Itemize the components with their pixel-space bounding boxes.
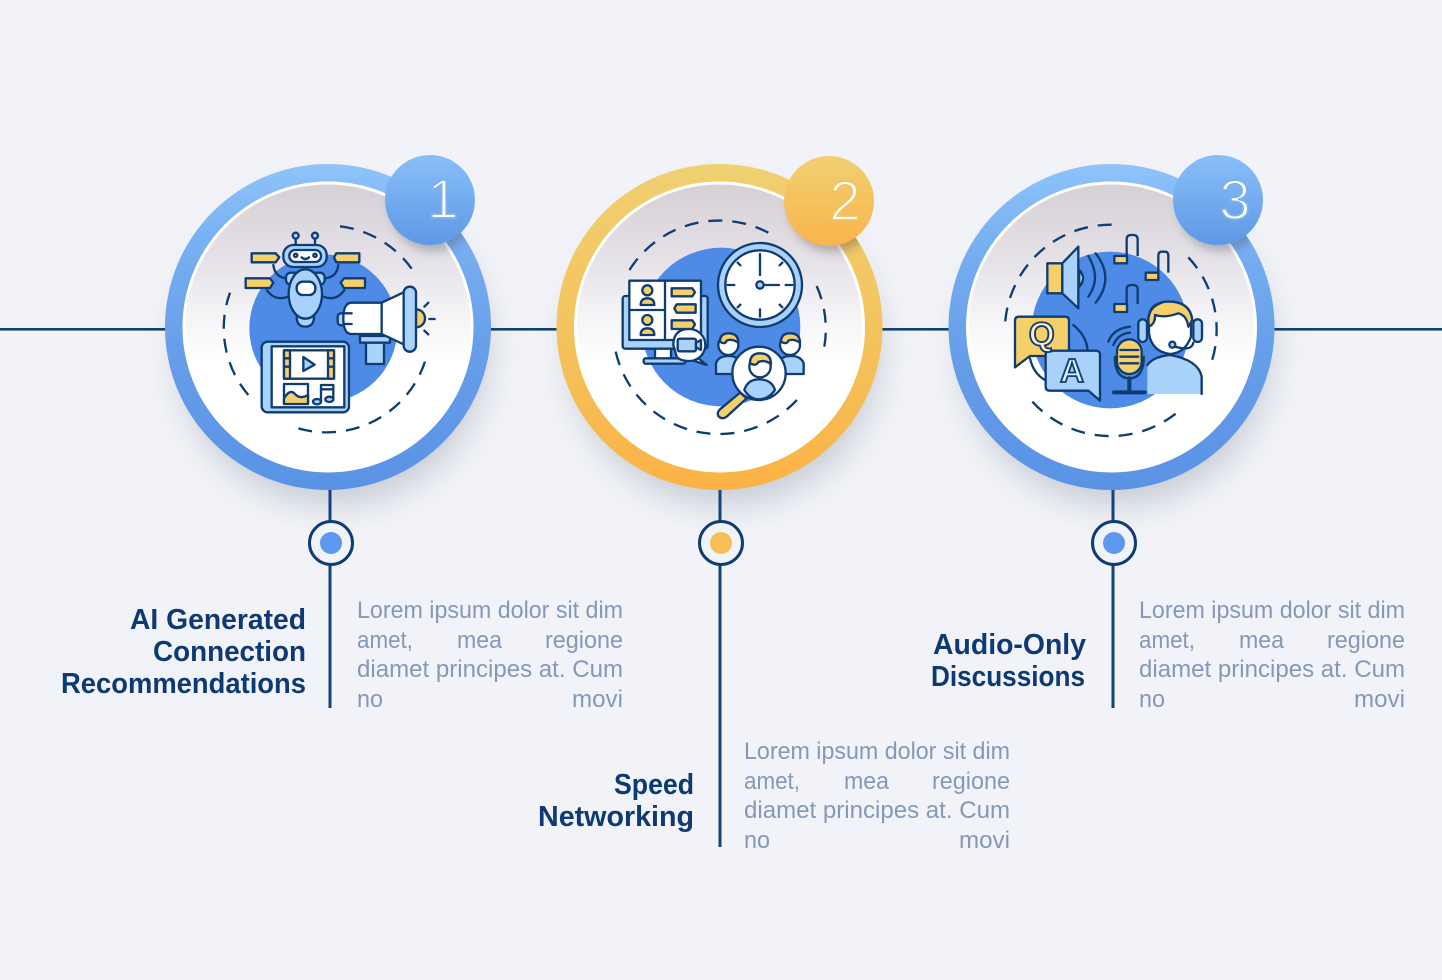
horizontal timeline <box>0 328 1442 331</box>
heading: step 3: Discussions <box>931 661 1085 693</box>
badge 1: 1 <box>427 167 459 230</box>
icon: robot, megaphone and media tablet <box>224 226 435 432</box>
panel: circle 3 <box>948 155 1274 490</box>
text block: step 2: mea <box>844 768 890 795</box>
heading: step 1: Recommendations <box>61 668 306 700</box>
text block: step 2: movi <box>959 827 1010 854</box>
badge 2: 2 <box>829 169 861 232</box>
text block: step 1: diamet principes at. Cum <box>357 656 623 683</box>
badge 2 <box>784 156 874 246</box>
panel: step 3 connector <box>1092 488 1136 708</box>
text block: step 2: regione <box>932 768 1010 795</box>
text block: step 2: amet, <box>744 768 800 795</box>
text block: step 1: no <box>357 686 383 713</box>
badge 3: 3 <box>1219 168 1251 231</box>
soft circle shadows <box>179 196 1271 504</box>
marker: step 3 <box>1092 522 1136 564</box>
text block: step 3: regione <box>1327 627 1405 654</box>
panel: step 1 connector <box>310 488 352 708</box>
text block: step 1: movi <box>572 686 623 713</box>
text block: step 2: no <box>744 827 770 854</box>
icon: audio, questions and answers, microphone and host <box>1005 225 1217 436</box>
icon: clock, video call and people search <box>616 221 826 434</box>
heading: step 2: Speed <box>614 769 694 801</box>
text block: step 3: no <box>1139 686 1165 713</box>
panel: circle 2 <box>556 156 882 490</box>
text block: step 2: diamet principes at. Cum <box>744 797 1010 824</box>
text block: step 3: movi <box>1354 686 1405 713</box>
text block: step 3: diamet principes at. Cum <box>1139 656 1405 683</box>
marker: step 1 <box>310 522 352 564</box>
text block: step 2: Lorem ipsum dolor sit dim <box>744 738 1010 765</box>
panel: step 2 connector <box>700 488 742 847</box>
heading: step 1: Connection <box>153 636 306 668</box>
marker: step 2 <box>700 522 742 564</box>
heading: step 1: AI Generated <box>130 604 306 636</box>
text block: step 1: mea <box>457 627 503 654</box>
heading: step 3: Audio-Only <box>933 629 1086 661</box>
badge 3 <box>1173 155 1263 245</box>
heading: step 2: Networking <box>538 801 694 833</box>
badge 1 <box>385 155 475 245</box>
letter A: A <box>1060 353 1084 390</box>
text block: step 3: amet, <box>1139 627 1195 654</box>
text block: step 1: regione <box>545 627 623 654</box>
text block: step 3: mea <box>1239 627 1285 654</box>
letter Q: Q <box>1029 317 1055 354</box>
panel: circle 1 <box>165 155 491 490</box>
text block: step 3: Lorem ipsum dolor sit dim <box>1139 597 1405 624</box>
text block: step 1: amet, <box>357 627 413 654</box>
text block: step 1: Lorem ipsum dolor sit dim <box>357 597 623 624</box>
